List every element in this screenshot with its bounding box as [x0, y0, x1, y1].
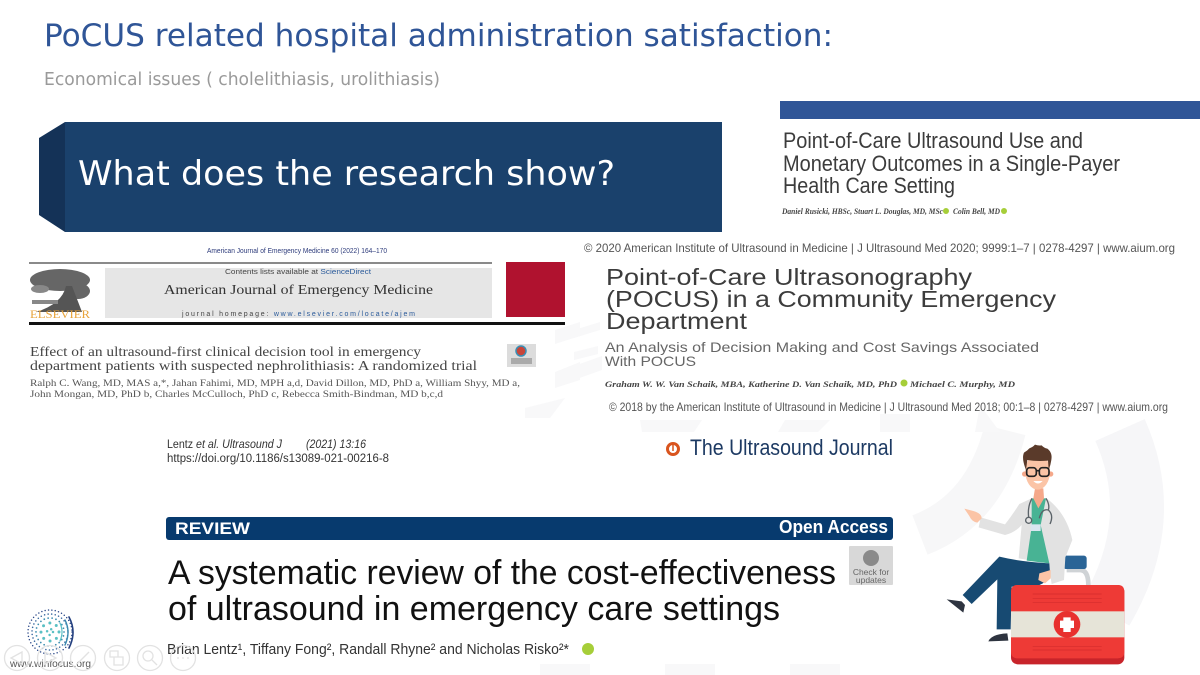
- logo: winfocus: www.winfocus.org: [9, 658, 91, 670]
- panel: American Journal of Emergency Medicine paper: journal homepage: www.elsevier.com/locate/ajem: [181, 311, 415, 318]
- panel: monetary outcomes paper: Monetary Outcomes in a Single-Payer: [783, 151, 1120, 176]
- panel: American Journal of Emergency Medicine paper: Effect of an ultrasound-first clinical decision tool in emergency: [30, 345, 421, 360]
- panel: POCUS community ED paper: Michael C. Murphy, MD: [909, 379, 1015, 389]
- panel: POCUS community ED paper: © 2020 American Institute of Ultrasound in Medicine | J Ultrasound Med 2020; 9999:1–7 | 0278-4297 | www.aium.org: [584, 241, 1175, 255]
- panel: monetary outcomes paper: [780, 101, 1200, 216]
- panel: monetary outcomes paper: Health Care Setting: [783, 173, 955, 198]
- glasses: [1027, 468, 1049, 476]
- panel: POCUS community ED paper: Graham W. W. Van Schaik, MBA, Katherine D. Van Schaik, MD, PhD: [605, 379, 897, 389]
- panel: cost-effectiveness review paper: Lentz et al. Ultrasound J: [167, 439, 282, 451]
- smile: [1033, 481, 1043, 483]
- hair: [1023, 445, 1052, 470]
- panel: POCUS community ED paper: [584, 241, 1175, 414]
- panel: American Journal of Emergency Medicine paper: Contents lists available at ScienceDirect: [225, 269, 371, 276]
- neck: [1033, 488, 1044, 508]
- trousers: [963, 557, 1050, 629]
- panel: cost-effectiveness review paper: Brian Lentz¹, Tiffany Fong², Randall Rhyne² and Nicholas Risko²*: [167, 641, 569, 658]
- banner: what does the research show: What does the research show?: [78, 154, 615, 193]
- panel: monetary outcomes paper: Daniel Rusicki, HBSc, Stuart L. Douglas, MD, MSc: [781, 207, 943, 216]
- first-aid kit: [1011, 585, 1124, 664]
- journal cover: [506, 262, 565, 317]
- review header bar: REVIEW: [175, 519, 251, 538]
- logo: winfocus: [9, 610, 91, 670]
- head: [1025, 454, 1050, 490]
- icon: check for updates: updates: [856, 575, 886, 585]
- panel: POCUS community ED paper: (POCUS) in a Community Emergency: [606, 286, 1057, 312]
- icon: check for updates: [849, 546, 893, 585]
- scrubs: [1027, 498, 1049, 563]
- panel: cost-effectiveness review paper: https://doi.org/10.1186/s13089-021-00216-8: [167, 453, 389, 465]
- panel: POCUS community ED paper: An Analysis of Decision Making and Cost Savings Associated: [605, 339, 1039, 355]
- panel: American Journal of Emergency Medicine paper: American Journal of Emergency Medicine: [164, 283, 433, 298]
- panel: cost-effectiveness review paper: A systematic review of the cost-effectiveness: [168, 554, 836, 592]
- illustration: doctor sitting on first-aid kit: [947, 445, 1124, 664]
- panel: American Journal of Emergency Medicine paper: ELSEVIER: [30, 307, 90, 321]
- panel: POCUS community ED paper: Point-of-Care Ultrasonography: [606, 264, 973, 290]
- review header bar: Open Access: [779, 517, 888, 537]
- title: PoCUS related hospital administration satisfaction:: [44, 18, 833, 54]
- stethoscope: [1026, 498, 1052, 524]
- id badge: [1031, 524, 1041, 531]
- pointing hand: [964, 509, 982, 523]
- panel: cost-effectiveness review paper: The Ultrasound Journal: [690, 435, 893, 460]
- toolbar: slideshow controls: [4, 646, 196, 670]
- icon: check for updates: Check for: [853, 567, 889, 577]
- icon: SpringerOpen logo: [668, 444, 678, 454]
- panel: monetary outcomes paper: Point-of-Care Ultrasound Use and: [783, 128, 1083, 153]
- doctor coat: [979, 498, 1072, 584]
- panel: American Journal of Emergency Medicine paper: American Journal of Emergency Medicine 60 (2022) 164–170: [207, 248, 387, 255]
- panel: monetary outcomes paper: Colin Bell, MD: [953, 207, 1000, 216]
- panel: POCUS community ED paper: With POCUS: [605, 353, 696, 369]
- icon: check for updates: [507, 344, 536, 367]
- icon: kit handle: [1063, 556, 1088, 585]
- subtitle: Economical issues ( cholelithiasis, urolithiasis): [44, 69, 440, 90]
- panel: POCUS community ED paper: Department: [606, 308, 748, 334]
- review header bar: [166, 517, 893, 540]
- panel: cost-effectiveness review paper: of ultrasound in emergency care settings: [168, 590, 780, 628]
- banner: what does the research show: [39, 122, 722, 232]
- panel: American Journal of Emergency Medicine paper: department patients with suspected nephrolithiasis: A randomized trial: [30, 359, 477, 374]
- panel: American Journal of Emergency Medicine paper: Ralph C. Wang, MD, MAS a,*, Jahan Fahimi, MD, MPH a,d, David Dillon, MD, PhD a, William Shyy, MD a,: [30, 379, 520, 389]
- panel: American Journal of Emergency Medicine paper: [29, 248, 565, 400]
- shoes: [947, 599, 1008, 641]
- icon: Elsevier tree: [30, 269, 90, 312]
- panel: cost-effectiveness review paper: [166, 435, 893, 658]
- resting hand: [1038, 570, 1051, 583]
- panel: cost-effectiveness review paper: (2021) 13:16: [306, 439, 367, 451]
- panel: American Journal of Emergency Medicine paper: John Mongan, MD, PhD b, Charles McCulloch, PhD c, Rebecca Smith-Bindman, MD b,c,d: [30, 390, 443, 400]
